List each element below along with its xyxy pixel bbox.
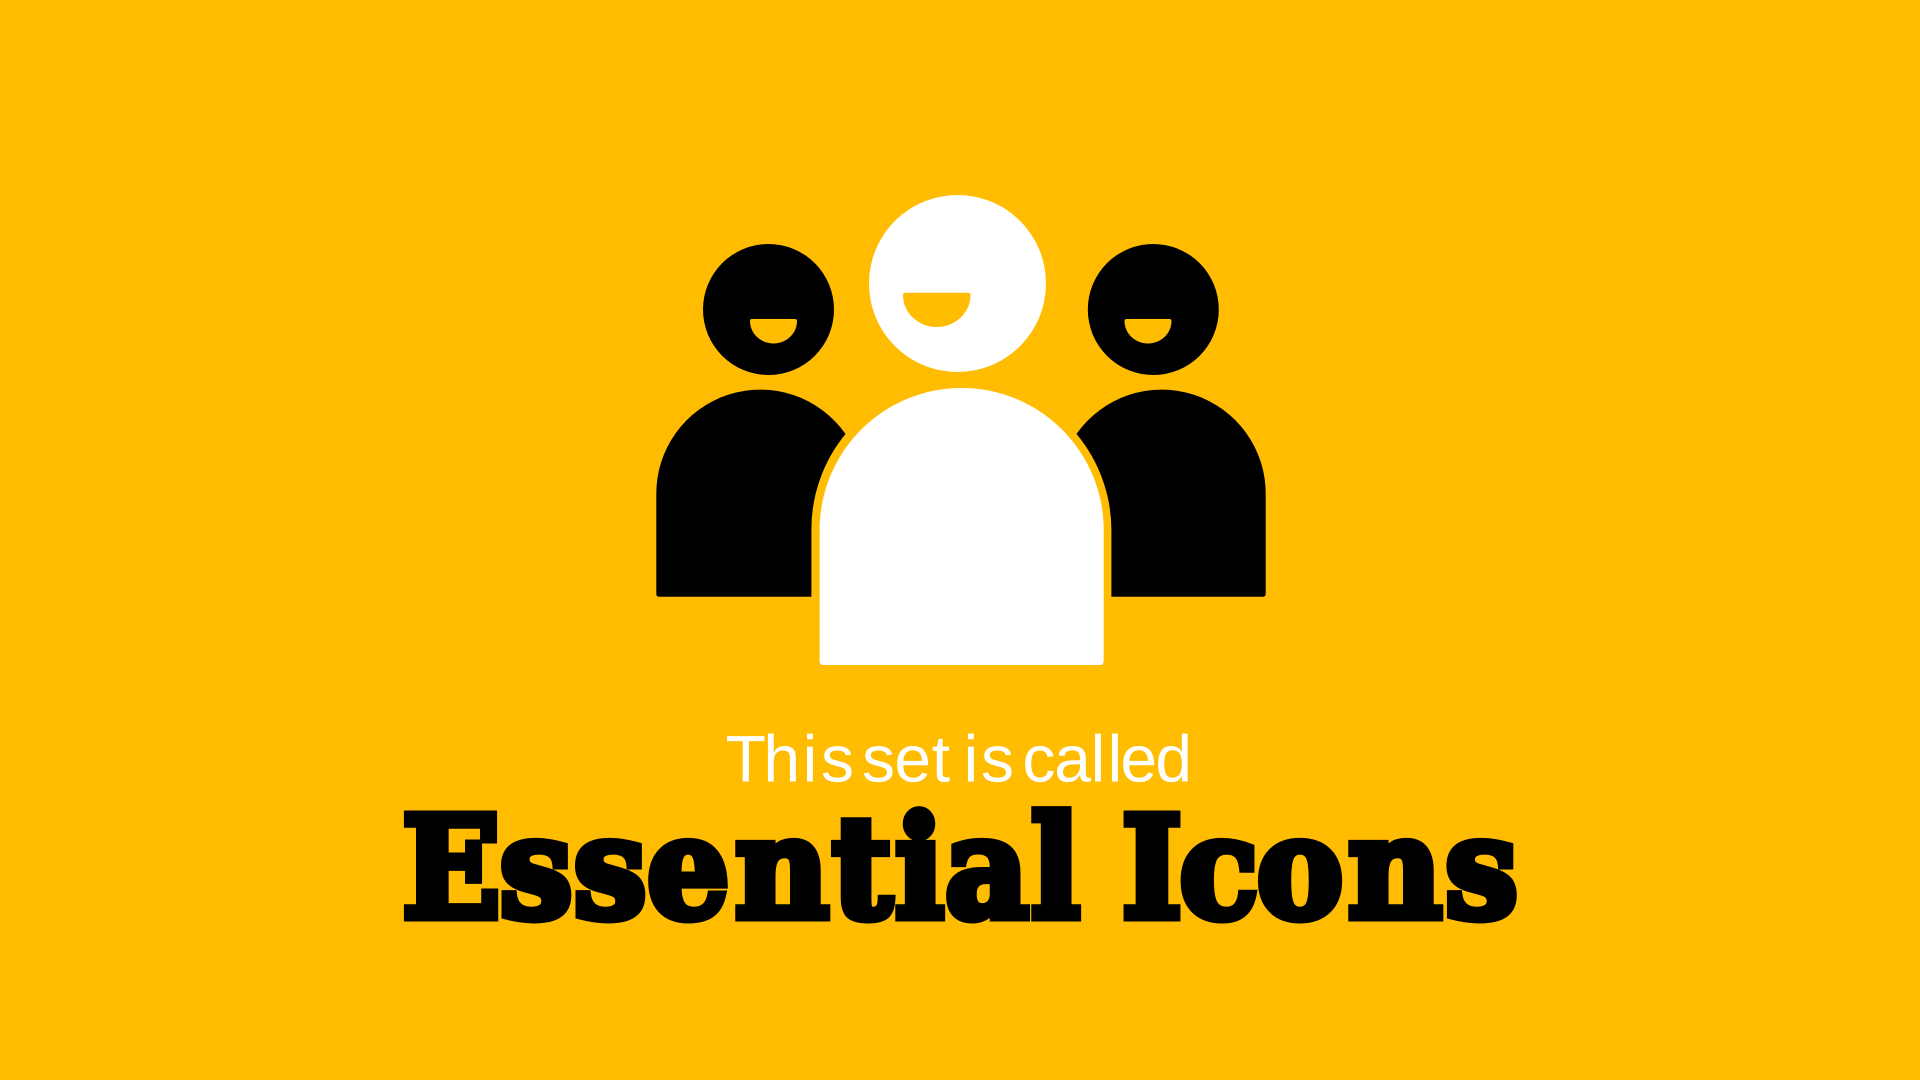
right person smile — [1124, 319, 1172, 344]
centre person body — [820, 388, 1104, 665]
centre person smile — [903, 293, 970, 327]
subtitle: This set is called — [726, 722, 1192, 796]
left person body — [656, 390, 846, 597]
right person body — [1076, 390, 1266, 597]
left person head — [703, 244, 834, 375]
icon: right person — [1076, 244, 1266, 597]
title: Essential Icons — [402, 787, 1518, 951]
icon: centre person — [820, 195, 1104, 665]
right person head — [1088, 244, 1219, 375]
left person smile — [750, 319, 797, 344]
centre person head — [869, 195, 1046, 372]
icon: left person — [656, 244, 846, 597]
icon: group of three smiling people — [656, 195, 1266, 665]
